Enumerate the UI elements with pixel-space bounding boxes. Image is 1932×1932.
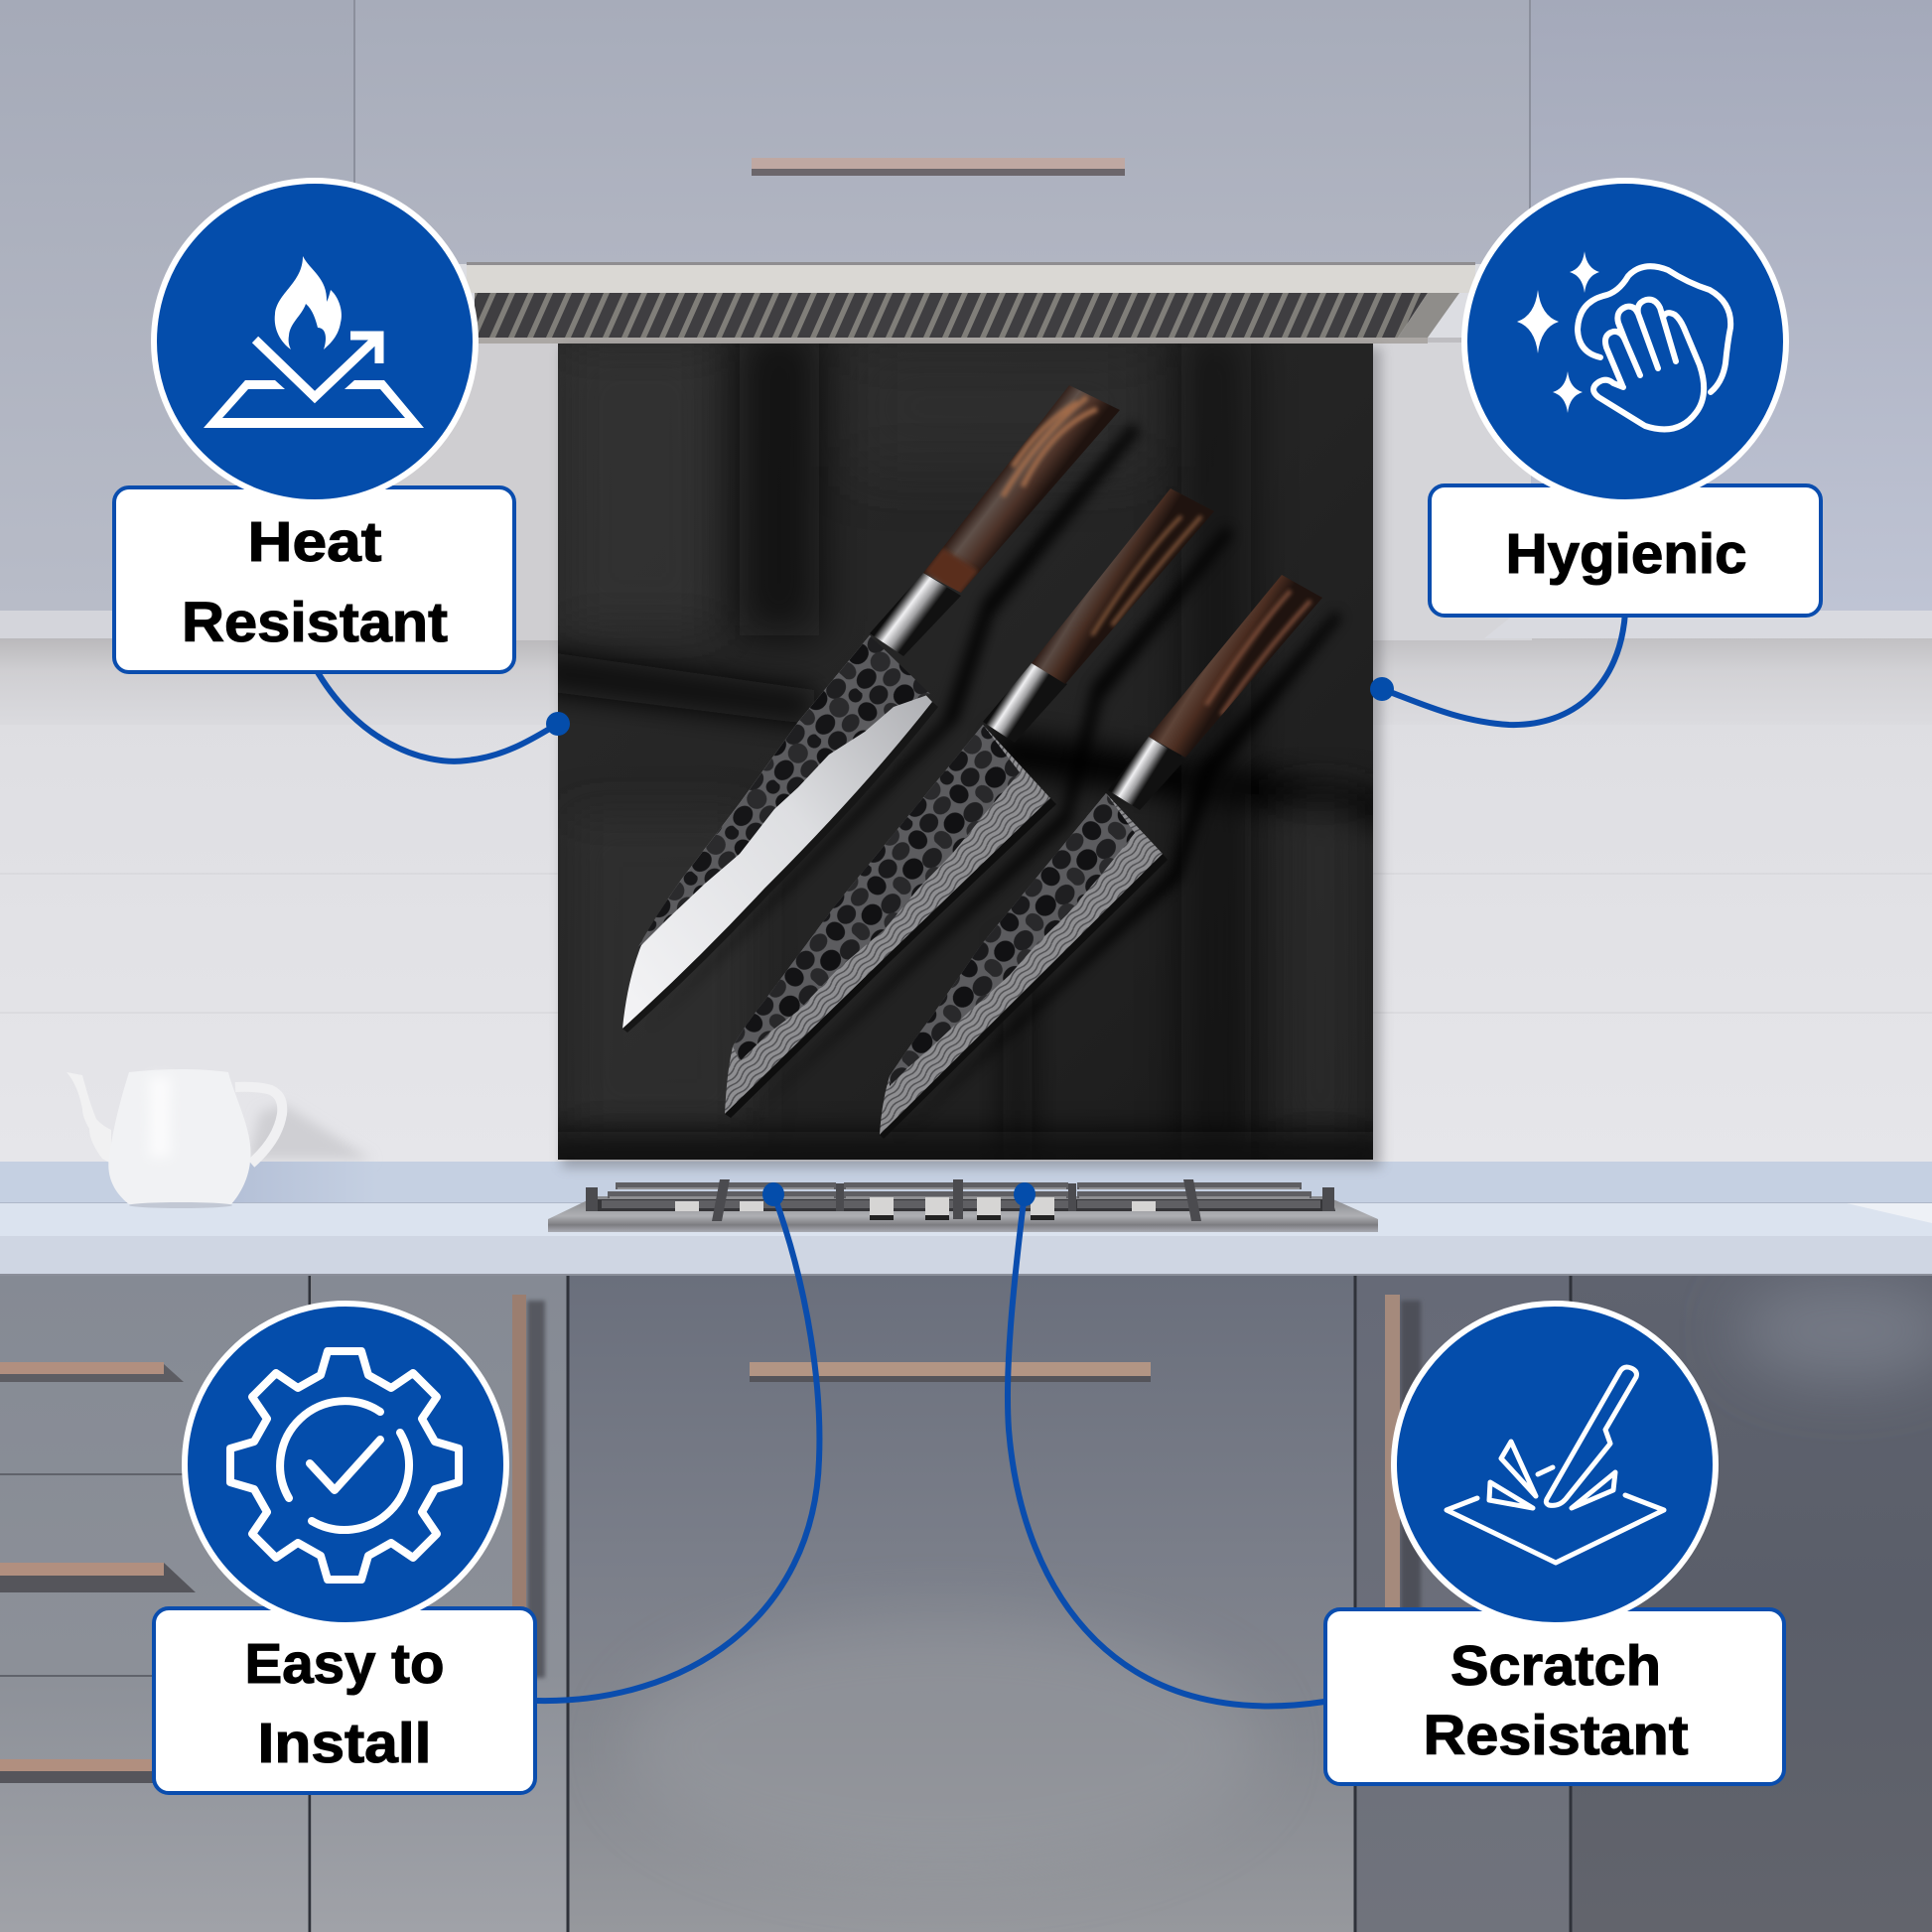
- icon: hand wiping with sparkles: [1464, 181, 1786, 502]
- icon: gear with check mark: [185, 1304, 506, 1625]
- tile lines: [0, 874, 1932, 1013]
- label box: Hygienic: [1505, 522, 1747, 586]
- lower handles: [0, 1295, 1421, 1783]
- label box: Easy to: [244, 1632, 445, 1696]
- connector: heat resistant: [315, 667, 570, 761]
- upper handle: [752, 158, 1125, 176]
- label box: Resistant: [182, 591, 448, 654]
- teapot: [67, 1069, 377, 1208]
- panel: glass splashback with knives: [536, 328, 1390, 1181]
- knife shadows: [739, 422, 1341, 1040]
- range hood: [467, 262, 1475, 344]
- wall: [0, 338, 1932, 1172]
- countertop: [0, 1162, 1932, 1276]
- label box: [114, 487, 514, 672]
- label box: Heat: [248, 510, 382, 574]
- label box: [1430, 485, 1821, 616]
- lower cabinets: [0, 1276, 1932, 1932]
- connector: hygienic: [1370, 613, 1625, 725]
- label box: Install: [258, 1712, 431, 1775]
- label box: [1325, 1609, 1784, 1784]
- connector: easy to install: [537, 1182, 819, 1701]
- label box: Scratch: [1450, 1634, 1661, 1698]
- callout: heat resistant: [114, 181, 514, 672]
- upper cabinets: [0, 0, 1932, 638]
- icon: knife scratching a surface: [1394, 1304, 1716, 1625]
- callout: easy to install: [154, 1304, 535, 1793]
- knife 3: [880, 575, 1322, 1139]
- knife 1: [622, 385, 1120, 1033]
- panel lighting bands: [536, 328, 1390, 1181]
- cooktop: [548, 1179, 1378, 1232]
- callout: scratch resistant: [1325, 1304, 1784, 1784]
- knife 2: [725, 488, 1214, 1118]
- label box: Resistant: [1424, 1704, 1689, 1767]
- connector: scratch resistant: [1008, 1182, 1324, 1706]
- icon: flame on surface with deflecting arrow: [154, 181, 476, 502]
- callout: hygienic: [1430, 181, 1821, 616]
- label box: [154, 1608, 535, 1793]
